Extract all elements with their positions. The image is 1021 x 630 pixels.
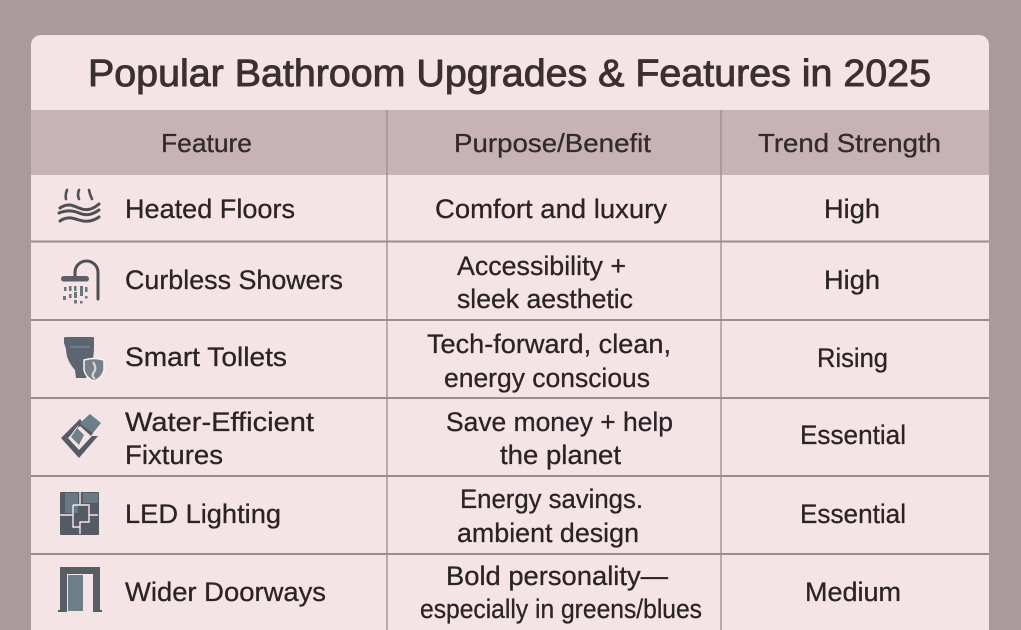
row benefit: Tech-forward, clean, energy conscious <box>427 329 671 393</box>
title: Popular Bathroom Upgrades & Features in 2025 <box>88 53 931 95</box>
row benefit: Bold personality, especially in greens/blues: Bold personality— <box>446 561 668 591</box>
column headings: Trend Strength <box>758 128 941 158</box>
row trend: High: High <box>824 194 880 224</box>
icon: curbless shower <box>61 261 98 304</box>
row benefit: Accessibility + sleek aesthetic: sleek aesthetic <box>457 284 633 314</box>
row benefit: Energy savings, ambient design: ambient design <box>457 518 639 548</box>
row benefit: Energy savings, ambient design <box>457 484 643 548</box>
row benefit: Bold personality, especially in greens/blues <box>420 561 702 624</box>
row benefit: Save money + help the planet: the planet <box>500 440 621 470</box>
row benefit: Save money + help the planet: Save money + help <box>446 407 673 437</box>
row benefit: Save money + help the planet <box>446 407 673 470</box>
row benefit: Tech-forward, clean, energy conscious: Tech-forward, clean, <box>427 329 671 359</box>
row label: Heated Floors: Heated Floors <box>125 194 295 224</box>
row benefit: Energy savings, ambient design: Energy savings. <box>460 484 643 514</box>
row label: LED Lighting: LED Lighting <box>125 499 281 529</box>
icon: wider doorway <box>58 567 102 612</box>
icon: water-efficient fixture <box>61 414 101 458</box>
icon: smart toilet <box>64 337 104 381</box>
row label: Curbless Showers: Curbless Showers <box>125 265 343 295</box>
row label: Water-Efficient Fixtures <box>125 407 315 470</box>
row trend: Essential: Essential <box>800 499 906 529</box>
row label: Wider Doorways: Wider Doorways <box>125 577 326 607</box>
row benefit: Accessibility + sleek aesthetic: Accessibility + <box>457 251 626 281</box>
row trend: Essential: Essential <box>800 420 906 450</box>
icon: heated floors <box>59 190 99 221</box>
row trend: Medium: Medium <box>805 577 901 607</box>
row benefit: Bold personality, especially in greens/blues: especially in greens/blues <box>420 594 702 624</box>
row trend: Rising: Rising <box>817 343 888 373</box>
row label: Water-Efficient Fixtures: Water-Efficient <box>125 407 315 437</box>
column headings: Purpose/Benefit <box>454 128 652 158</box>
icon: LED lighting <box>60 492 99 535</box>
row trend: High: High <box>824 265 880 295</box>
row benefit: Accessibility + sleek aesthetic <box>457 251 633 314</box>
table header band <box>31 110 989 175</box>
row label: Water-Efficient Fixtures: Fixtures <box>125 440 223 470</box>
column headings: Feature <box>161 128 252 158</box>
column headings <box>161 128 941 158</box>
row benefit: Comfort and luxury: Comfort and luxury <box>435 194 668 224</box>
row label: Smart Tollets: Smart Tollets <box>125 342 287 372</box>
row benefit: Tech-forward, clean, energy conscious: energy conscious <box>444 363 650 393</box>
